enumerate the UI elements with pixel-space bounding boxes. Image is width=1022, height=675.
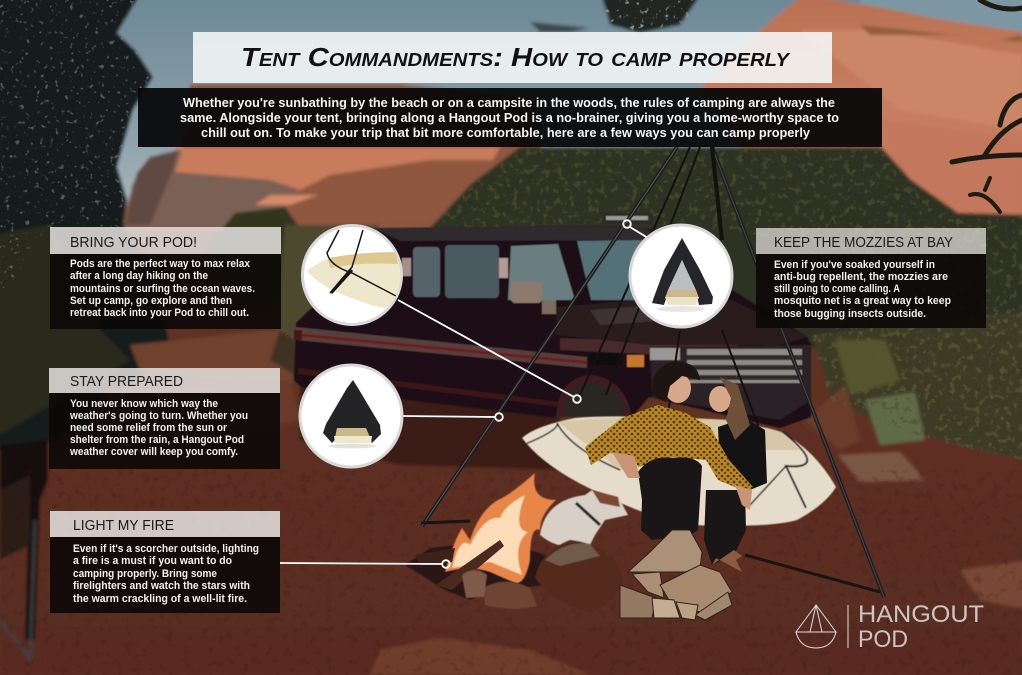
- panel: keep the mozzies at bay: those bugging insects outside.: [774, 308, 926, 320]
- panel: bring your pod: BRING YOUR POD!: [70, 234, 197, 251]
- title: Tent Commandments: How to camp properly: [241, 42, 791, 72]
- icon: pod detail circle: [302, 226, 402, 324]
- man shirt: [585, 405, 753, 493]
- panel: keep the mozzies at bay: anti-bug repellent, the mozzies are: [774, 271, 948, 283]
- icon: weather cover circle: [300, 365, 402, 467]
- panel: keep the mozzies at bay: KEEP THE MOZZIES AT BAY: [774, 234, 953, 251]
- panel: light my fire: firelighters and watch the stars with: [73, 580, 250, 592]
- panel: stay prepared: shelter from the rain, a Hangout Pod: [70, 434, 244, 446]
- panel: light my fire: [50, 511, 280, 613]
- panel: bring your pod: Set up camp, go explore and then: [70, 295, 232, 307]
- panel: stay prepared: need some relief from the sun or: [70, 422, 227, 434]
- intro text: [180, 95, 839, 140]
- panel: light my fire: LIGHT MY FIRE: [73, 517, 174, 534]
- panel: bring your pod: retreat back into your Pod to chill out.: [70, 307, 249, 319]
- panel: keep the mozzies at bay: [756, 228, 986, 328]
- couple on the pod: [585, 362, 767, 572]
- intro box: [138, 88, 882, 147]
- panel: stay prepared: You never know which way the: [70, 398, 218, 410]
- panel: keep the mozzies at bay: still going to come calling. A: [774, 283, 900, 295]
- intro text: same. Alongside your tent, bringing along a Hangout Pod is a no-brainer, giving you a home-worthy space to: [180, 110, 839, 125]
- ground patches: [370, 638, 590, 675]
- campfire: [405, 473, 560, 600]
- van: [294, 214, 811, 428]
- logo: POD: [858, 626, 908, 653]
- panel: stay prepared: weather cover will keep you comfy.: [69, 446, 238, 458]
- van shadow: [300, 385, 560, 470]
- tripod: [421, 147, 884, 597]
- grille and bumper: [650, 345, 811, 420]
- man legs: [638, 457, 702, 540]
- panel: bring your pod: [50, 227, 281, 329]
- panel: bring your pod: mountains or surfing the ocean waves.: [70, 283, 255, 295]
- logo: HANGOUT: [858, 601, 984, 628]
- hood: [556, 300, 807, 345]
- icon: mosquito net circle: [630, 225, 732, 327]
- pod: [522, 416, 836, 526]
- logo: [796, 601, 984, 653]
- panel: light my fire: a fire is a must if you want to do: [73, 555, 232, 567]
- rocks: [462, 540, 622, 612]
- panel: light my fire: the warm crackling of a well-lit fire.: [73, 593, 247, 605]
- panel: intro: [138, 32, 882, 147]
- man hands: [612, 452, 640, 478]
- connector lines: [280, 220, 648, 568]
- panel: light my fire: Even if it's a scorcher outside, lighting: [73, 543, 259, 555]
- mid cliffs: [123, 84, 540, 230]
- panel: stay prepared: [49, 368, 280, 469]
- man head: [665, 373, 691, 403]
- woman: [718, 418, 767, 492]
- title box: [193, 32, 832, 83]
- right bushes: [812, 310, 1022, 462]
- panel: stay prepared: STAY PREPARED: [70, 373, 183, 390]
- chair: [0, 440, 48, 640]
- panel: light my fire: camping properly. Bring some: [73, 568, 217, 580]
- path under first panel: [130, 329, 295, 390]
- forest middle: [300, 147, 1022, 360]
- panel: bring your pod: Pods are the perfect way to max relax: [70, 258, 251, 270]
- panel: stay prepared: weather's going to turn. Whether you: [69, 410, 248, 422]
- panel: keep the mozzies at bay: mosquito net is a great way to keep: [774, 295, 951, 307]
- intro text: Whether you're sunbathing by the beach or on a campsite in the woods, the rules of camping are always the: [183, 95, 835, 110]
- top tree: [600, 0, 704, 33]
- right tree branches: [952, 0, 1022, 212]
- right cliff: [700, 0, 1022, 215]
- firewood: [620, 530, 732, 620]
- panel: keep the mozzies at bay: Even if you've soaked yourself in: [774, 259, 935, 271]
- left trees: [0, 0, 170, 450]
- wheel: [556, 375, 632, 417]
- panel: bring your pod: after a long day hiking on the: [70, 270, 208, 282]
- dog: [540, 490, 628, 547]
- intro text: chill out on. To make your trip that bit more comfortable, here are a few ways you can camp properly: [201, 125, 811, 140]
